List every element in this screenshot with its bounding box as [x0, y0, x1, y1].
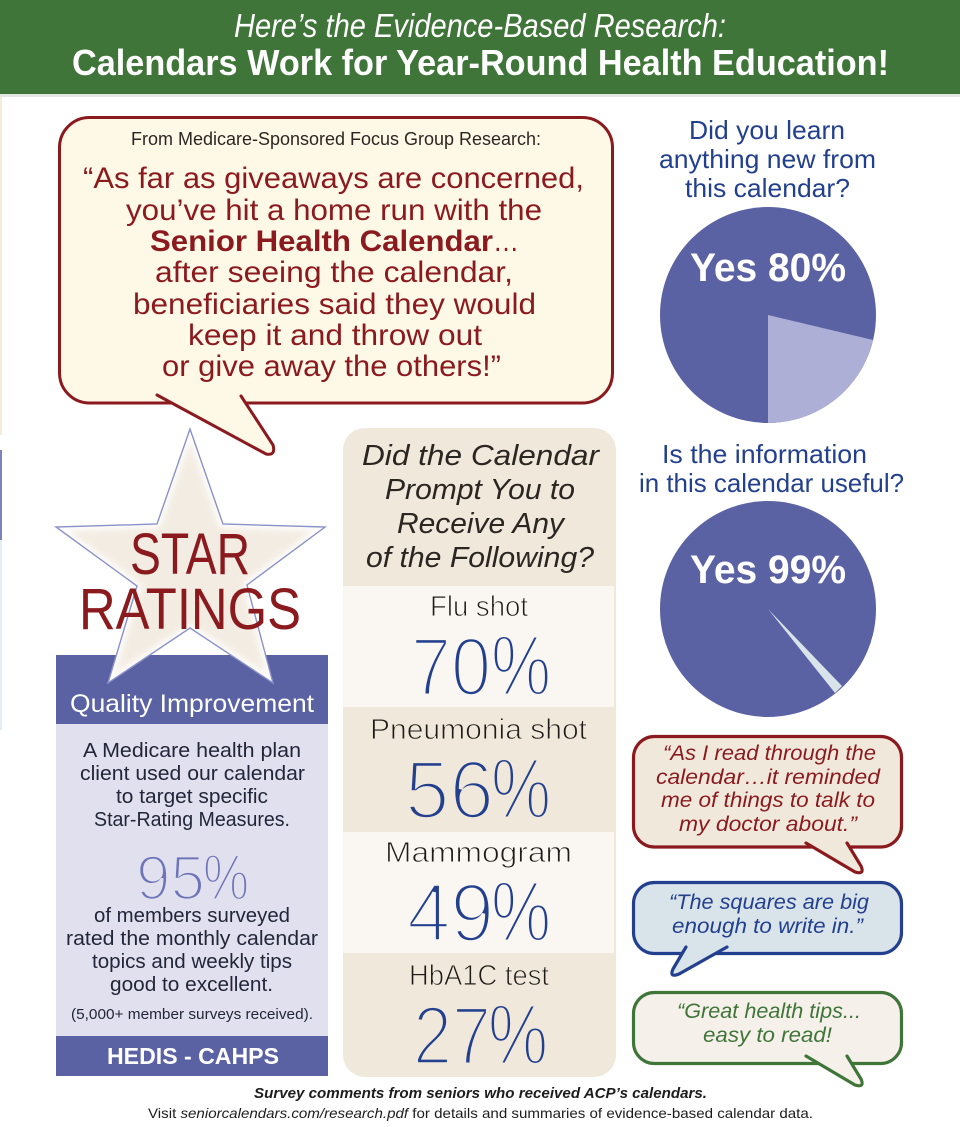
- survey result: of members surveyed: [94, 905, 290, 927]
- client description: Star-Rating Measures.: [94, 809, 290, 831]
- client description: client used our calendar: [80, 763, 305, 785]
- pie chart: yes 80%: [660, 207, 876, 423]
- footer source note: Visit seniorcalendars.com/research.pdf for details and summaries of evidence-based calendar data.: [148, 1105, 813, 1121]
- main quote speech bubble: beneficiaries said they would: [133, 288, 536, 321]
- speech bubble: reminded me: calendar…it reminded: [656, 766, 881, 789]
- pie question: information useful: in this calendar useful?: [639, 468, 904, 498]
- main quote speech bubble: or give away the others!”: [162, 350, 501, 383]
- footer source note: Survey comments from seniors who received ACP’s calendars.: [254, 1085, 707, 1102]
- survey result: rated the monthly calendar: [66, 928, 318, 950]
- panel: quality improvement: Quality Improvement: [70, 690, 314, 718]
- main quote speech bubble: …: [493, 225, 519, 258]
- stat: HbA1C test: [409, 960, 549, 1083]
- panel heading: Did the Calendar: [362, 440, 600, 472]
- stat: pneumonia shot: %: [491, 742, 551, 837]
- pie question: learned something new: Did you learn: [689, 115, 845, 145]
- survey result: (5,000+ member surveys received).: [71, 1006, 313, 1023]
- star ratings heading: STAR: [130, 522, 250, 587]
- speech bubble: big squares: enough to write in.”: [672, 915, 864, 938]
- stat: flu shot: 70: [411, 620, 491, 713]
- footer source note: [148, 1085, 813, 1121]
- client description: A Medicare health plan: [83, 740, 301, 762]
- main quote speech bubble: you’ve hit a home run with the: [126, 194, 542, 227]
- main quote speech bubble: after seeing the calendar,: [155, 256, 513, 289]
- icon: star: [56, 429, 325, 683]
- speech bubble: big squares: [634, 882, 902, 975]
- stat: mammogram: [385, 837, 572, 960]
- header banner: Calendars Work for Year-Round Health Education!: [72, 42, 889, 83]
- stat: 95%: 95: [136, 844, 205, 914]
- main quote speech bubble: Senior Health Calendar: [150, 225, 493, 258]
- panel heading: Receive Any: [397, 508, 566, 540]
- main quote speech bubble: keep it and throw out: [188, 319, 483, 352]
- stat: pneumonia shot: Pneumonia shot: [370, 714, 587, 746]
- star ratings badge: [56, 429, 325, 683]
- header banner: [0, 0, 960, 97]
- pie question: learned something new: this calendar?: [685, 173, 850, 203]
- survey result: good to excellent.: [110, 974, 273, 996]
- main quote speech bubble: From Medicare-Sponsored Focus Group Research:: [131, 129, 541, 149]
- client description: [80, 740, 305, 831]
- stat: mammogram: 49: [407, 866, 494, 959]
- speech bubble: reminded me: my doctor about.”: [679, 813, 858, 836]
- stat: pneumonia shot: 56: [405, 743, 494, 836]
- stat: flu shot: Flu shot: [430, 591, 528, 623]
- speech bubble: reminded me: [634, 736, 902, 873]
- speech bubble: health tips: “Great health tips...: [677, 1000, 861, 1023]
- stat: flu shot: %: [491, 619, 551, 714]
- speech bubble: health tips: easy to read!: [703, 1024, 832, 1047]
- star ratings heading: [79, 522, 301, 642]
- stat: mammogram: %: [491, 865, 551, 960]
- survey result: topics and weekly tips: [92, 951, 292, 973]
- stat: pneumonia shot: [370, 714, 587, 837]
- panel heading: of the Following?: [366, 542, 595, 574]
- stat: HbA1C test: %: [488, 988, 548, 1083]
- stat: HbA1C test: 27: [413, 989, 491, 1082]
- pie question: learned something new: [659, 115, 876, 203]
- speech bubble: big squares: “The squares are big: [669, 891, 869, 914]
- pie question: information useful: Is the information: [662, 439, 867, 469]
- pie chart: yes 80%: Yes 80%: [690, 246, 846, 290]
- stat: mammogram: Mammogram: [385, 837, 572, 869]
- main quote speech bubble: “As far as giveaways are concerned,: [83, 162, 584, 195]
- stat: flu shot: [411, 591, 551, 714]
- panel: calendar prompted services: [343, 428, 616, 1083]
- star ratings heading: RATINGS: [79, 577, 301, 642]
- client description: to target specific: [116, 786, 268, 808]
- pie question: learned something new: anything new from: [659, 144, 876, 174]
- HEDIS CAHPS footer label: HEDIS - CAHPS: [107, 1043, 279, 1069]
- main quote speech bubble: [60, 118, 612, 454]
- panel heading: [362, 440, 600, 574]
- header banner: Here’s the Evidence-Based Research:: [234, 7, 726, 44]
- speech bubble: reminded me: me of things to talk to: [661, 789, 875, 812]
- panel: quality improvement: [56, 655, 328, 1076]
- stat: 95%: %: [203, 840, 249, 914]
- speech bubble: reminded me: “As I read through the: [663, 742, 876, 765]
- pie chart: yes 99%: Yes 99%: [690, 548, 846, 592]
- stat: HbA1C test: HbA1C test: [409, 960, 549, 992]
- speech bubble: health tips: [634, 992, 902, 1086]
- stat: 95%: [136, 840, 249, 914]
- panel heading: Prompt You to: [385, 474, 575, 506]
- survey result: [66, 905, 318, 1023]
- pie chart: yes 99%: [660, 501, 876, 717]
- pie question: information useful: [639, 439, 904, 498]
